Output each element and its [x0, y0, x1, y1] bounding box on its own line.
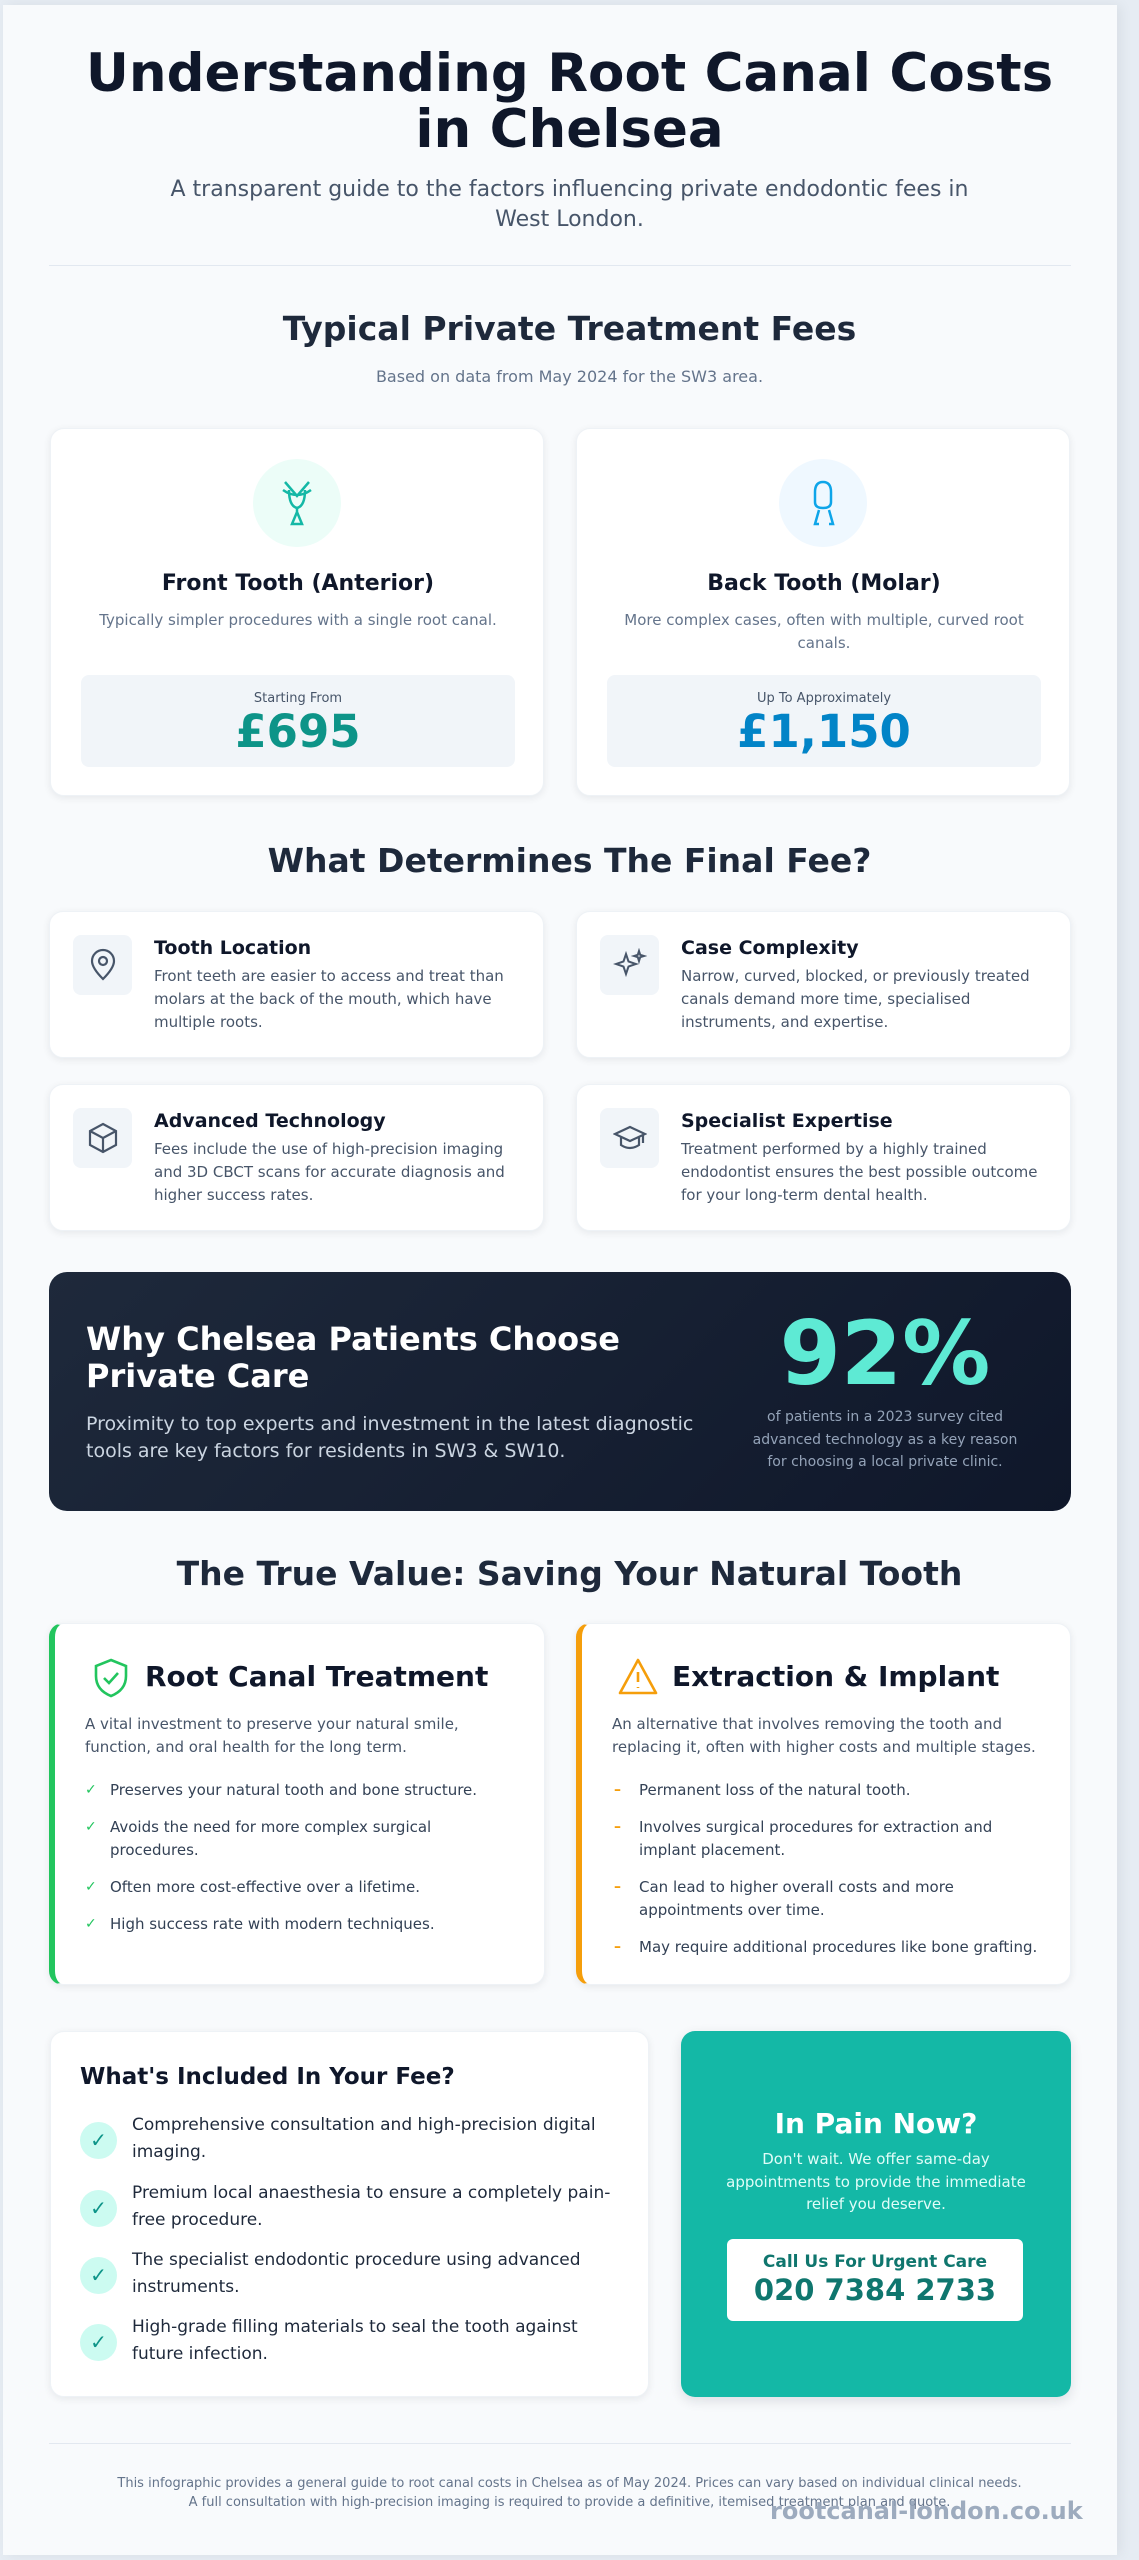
footer text: A full consultation with high-precision imaging is required to provide a definitive, itemised treatment plan and quote.: [189, 2495, 950, 2510]
card title: Back Tooth (Molar): [707, 571, 941, 596]
heading: fees: Typical Private Treatment Fees: [283, 309, 856, 348]
panel: root canal: ✓: [85, 1916, 97, 1932]
card desc: Typically simpler procedures with a single root canal.: [99, 611, 497, 629]
call box: [727, 2239, 1023, 2321]
factor: expertise: [576, 1084, 1071, 1231]
factor: complexity: Narrow, curved, blocked, or previously treated canals demand more time, specialised instruments, and expertise.: [681, 967, 1030, 1031]
list: drawbacks: Permanent loss of the natural tooth.: [639, 1781, 910, 1799]
list: benefits: Often more cost-effective over a lifetime.: [110, 1878, 420, 1896]
desc: A vital investment to preserve your natural smile, function, and oral health for the long term.: [85, 1715, 459, 1756]
list: included: ✓: [90, 2196, 107, 2220]
footer text: This infographic provides a general guide to root canal costs in Chelsea as of May 2024. Prices can vary based on individual clinical needs.: [117, 2476, 1022, 2491]
stat 92%: 92%: [780, 1302, 990, 1405]
heading: Extraction & Implant: [672, 1660, 999, 1693]
panel: root canal: [49, 1623, 545, 1985]
heading: factors: What Determines The Final Fee?: [268, 841, 871, 880]
factor: location: Front teeth are easier to access and treat than molars at the back of the mouth, which have multiple roots.: [154, 967, 504, 1031]
price box: Up To Approximately: [757, 691, 891, 706]
factor: location: Tooth Location: [154, 937, 311, 959]
panel: back tooth: [576, 428, 1070, 796]
list: drawbacks: May require additional procedures like bone grafting.: [639, 1938, 1037, 1956]
panel: extraction: –: [614, 1939, 621, 1955]
factor: location: [49, 911, 544, 1058]
card title: Front Tooth (Anterior): [162, 571, 434, 596]
price box: Starting From: [254, 691, 342, 706]
title: in Chelsea: [415, 99, 724, 160]
list: drawbacks: Can lead to higher overall costs and more appointments over time.: [639, 1878, 954, 1919]
stat caption: of patients in a 2023 survey cited advanced technology as a key reason for choosing a local private clinic.: [753, 1409, 1017, 1470]
heading: true value: The True Value: Saving Your Natural Tooth: [177, 1554, 962, 1593]
fees subtitle: Based on data from May 2024 for the SW3 area.: [376, 367, 763, 386]
factor: expertise: Specialist Expertise: [681, 1110, 893, 1132]
panel: root canal: ✓: [85, 1879, 97, 1895]
subtitle: A transparent guide to the factors influencing private endodontic fees in: [171, 177, 968, 202]
list: drawbacks: Involves surgical procedures for extraction and implant placement.: [639, 1818, 992, 1859]
icon: molar: [779, 459, 867, 547]
list: included: The specialist endodontic procedure using advanced instruments.: [132, 2250, 581, 2297]
subtitle: West London.: [495, 207, 644, 232]
title: Understanding Root Canal Costs: [86, 43, 1053, 104]
heading: What's Included In Your Fee?: [80, 2064, 455, 2090]
icon: sparkles: [600, 935, 659, 995]
icon: front tooth: [253, 459, 341, 547]
icon: warning: [618, 1658, 658, 1694]
list: drawbacks: [614, 1781, 1037, 1956]
factor: complexity: Case Complexity: [681, 937, 859, 959]
dark heading: Private Care: [86, 1357, 309, 1395]
list: benefits: Preserves your natural tooth and bone structure.: [110, 1781, 477, 1799]
call box: 020 7384 2733: [754, 2273, 996, 2307]
desc: An alternative that involves removing the tooth and replacing it, often with higher costs and multiple stages.: [612, 1715, 1036, 1756]
panel: root canal: ✓: [85, 1782, 97, 1798]
footer text: [117, 2476, 1022, 2510]
list: benefits: Avoids the need for more complex surgical procedures.: [110, 1818, 431, 1859]
subtitle: [170, 177, 968, 232]
factor: technology: Advanced Technology: [154, 1110, 386, 1132]
panel: extraction: [576, 1623, 1071, 1985]
list: benefits: [85, 1781, 477, 1933]
panel: root canal: ✓: [85, 1819, 97, 1835]
factor: technology: Fees include the use of high-precision imaging and 3D CBCT scans for accurate diagnosis and higher success rates.: [154, 1140, 505, 1204]
list: included: ✓: [90, 2128, 107, 2152]
call box: Call Us For Urgent Care: [763, 2252, 987, 2272]
dark heading: [86, 1320, 620, 1395]
dark paragraph: Proximity to top experts and investment in the latest diagnostic tools are key factors for residents in SW3 & SW10.: [86, 1413, 693, 1462]
panel: extraction: –: [614, 1819, 621, 1835]
icon: shield: [94, 1658, 128, 1698]
card desc: More complex cases, often with multiple, curved root canals.: [624, 611, 1024, 652]
dark heading: Why Chelsea Patients Choose: [86, 1320, 620, 1358]
panel: why chelsea (dark): [49, 1272, 1071, 1511]
price box: [81, 675, 515, 767]
price box: £1,150: [737, 705, 911, 758]
title: [86, 43, 1053, 160]
heading: In Pain Now?: [775, 2107, 977, 2140]
list: included: ✓: [90, 2330, 107, 2354]
factor: expertise: Treatment performed by a highly trained endodontist ensures the best possible outcome for your long-term dental health.: [681, 1140, 1037, 1204]
heading: Root Canal Treatment: [145, 1660, 488, 1693]
panel: extraction: –: [614, 1879, 621, 1895]
factor: complexity: [576, 911, 1071, 1058]
price box: [607, 675, 1041, 767]
factor: technology: [49, 1084, 544, 1231]
list: included: Comprehensive consultation and high-precision digital imaging.: [132, 2115, 596, 2162]
list: included: Premium local anaesthesia to ensure a completely pain-free procedure.: [132, 2183, 610, 2230]
icon: pin: [73, 935, 132, 995]
panel: front tooth: [50, 428, 544, 796]
panel: extraction: –: [614, 1782, 621, 1798]
list: included: [80, 2115, 610, 2364]
icon: graduation cap: [600, 1108, 659, 1168]
panel: included: [50, 2031, 649, 2397]
list: benefits: High success rate with modern techniques.: [110, 1915, 435, 1933]
list: included: High-grade filling materials to seal the tooth against future infection.: [132, 2317, 578, 2364]
icon: cube: [73, 1108, 132, 1168]
watermark: rootcanal-london.co.uk: [770, 2497, 1083, 2525]
price box: £695: [235, 705, 361, 758]
text: Don't wait. We offer same-day appointments to provide the immediate relief you deserve.: [726, 2150, 1026, 2213]
list: included: ✓: [90, 2263, 107, 2287]
panel: in pain now: [681, 2031, 1071, 2397]
